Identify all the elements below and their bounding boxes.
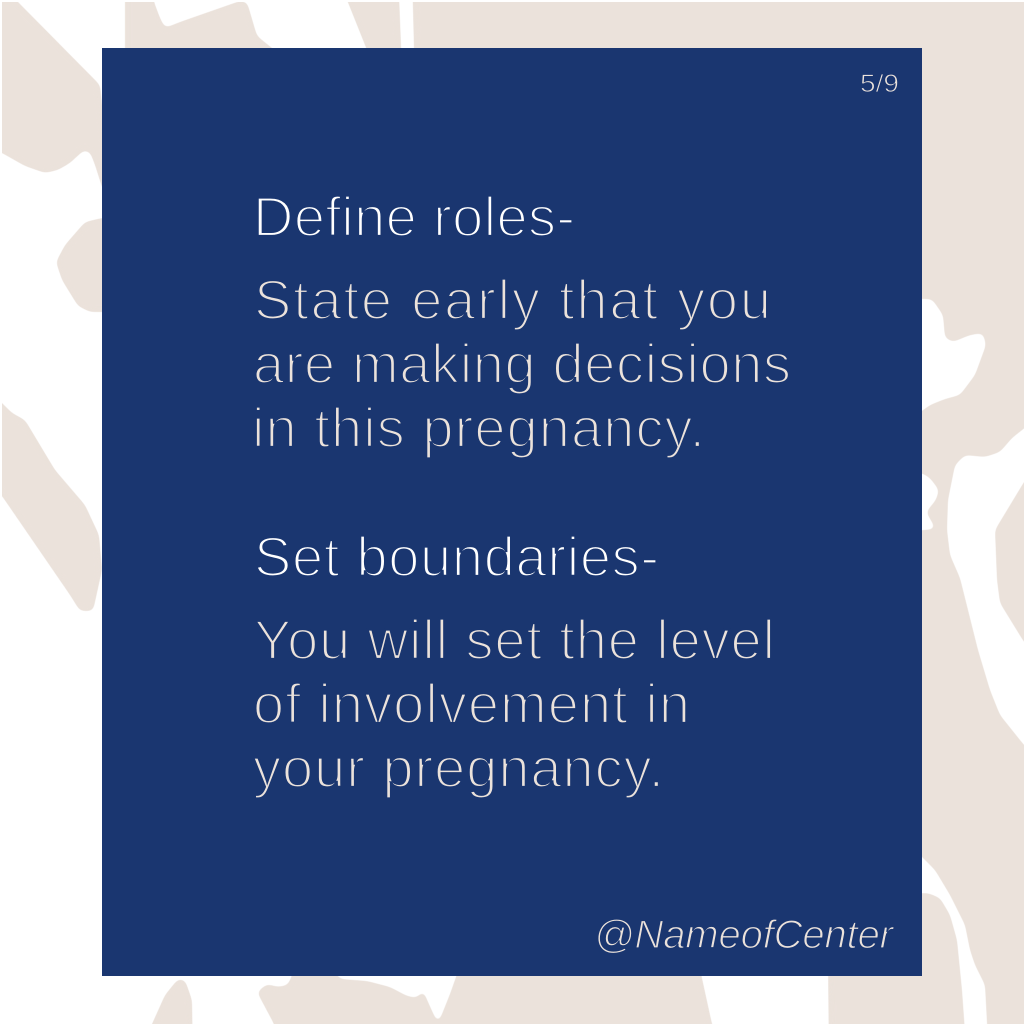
panel: navy card [102, 48, 922, 976]
shape: large right field [400, 0, 1024, 1024]
body: define roles text: in this pregnancy. [252, 396, 705, 459]
body: set boundaries text [253, 608, 775, 799]
shape: bottom centre field [257, 960, 725, 1024]
body: define roles text: are making decisions [253, 332, 791, 395]
cut-out: small right blob [900, 473, 939, 532]
shape: lower left blob [0, 372, 102, 611]
cut-out: right flowing band [947, 400, 1024, 780]
cut-out: upper right blob [900, 299, 986, 427]
cut-out: bottom right stream [900, 835, 989, 1024]
body: set boundaries text: of involvement in [253, 672, 690, 735]
body: define roles text [252, 268, 791, 459]
shape: top left fragment [125, 0, 300, 70]
text block: define roles [252, 185, 791, 459]
body: set boundaries text: your pregnancy. [253, 736, 664, 799]
cut-out: bottom centre notch [325, 960, 462, 1024]
handle: @NameofCenter [594, 913, 895, 957]
shape: bottom left spike [135, 979, 193, 1024]
text block: set boundaries [253, 525, 775, 799]
heading: define roles: Define roles- [253, 185, 575, 248]
shape: upper left blob [0, 0, 114, 215]
body: define roles text: State early that you [254, 268, 771, 331]
heading: set boundaries: Set boundaries- [254, 525, 659, 588]
body: set boundaries text: You will set the level [254, 608, 775, 671]
shape: top centre fragment [335, 0, 402, 70]
page number: 5/9 [860, 70, 899, 98]
background: white cut-outs [325, 299, 1024, 1024]
shape: middle left blob [56, 216, 130, 312]
